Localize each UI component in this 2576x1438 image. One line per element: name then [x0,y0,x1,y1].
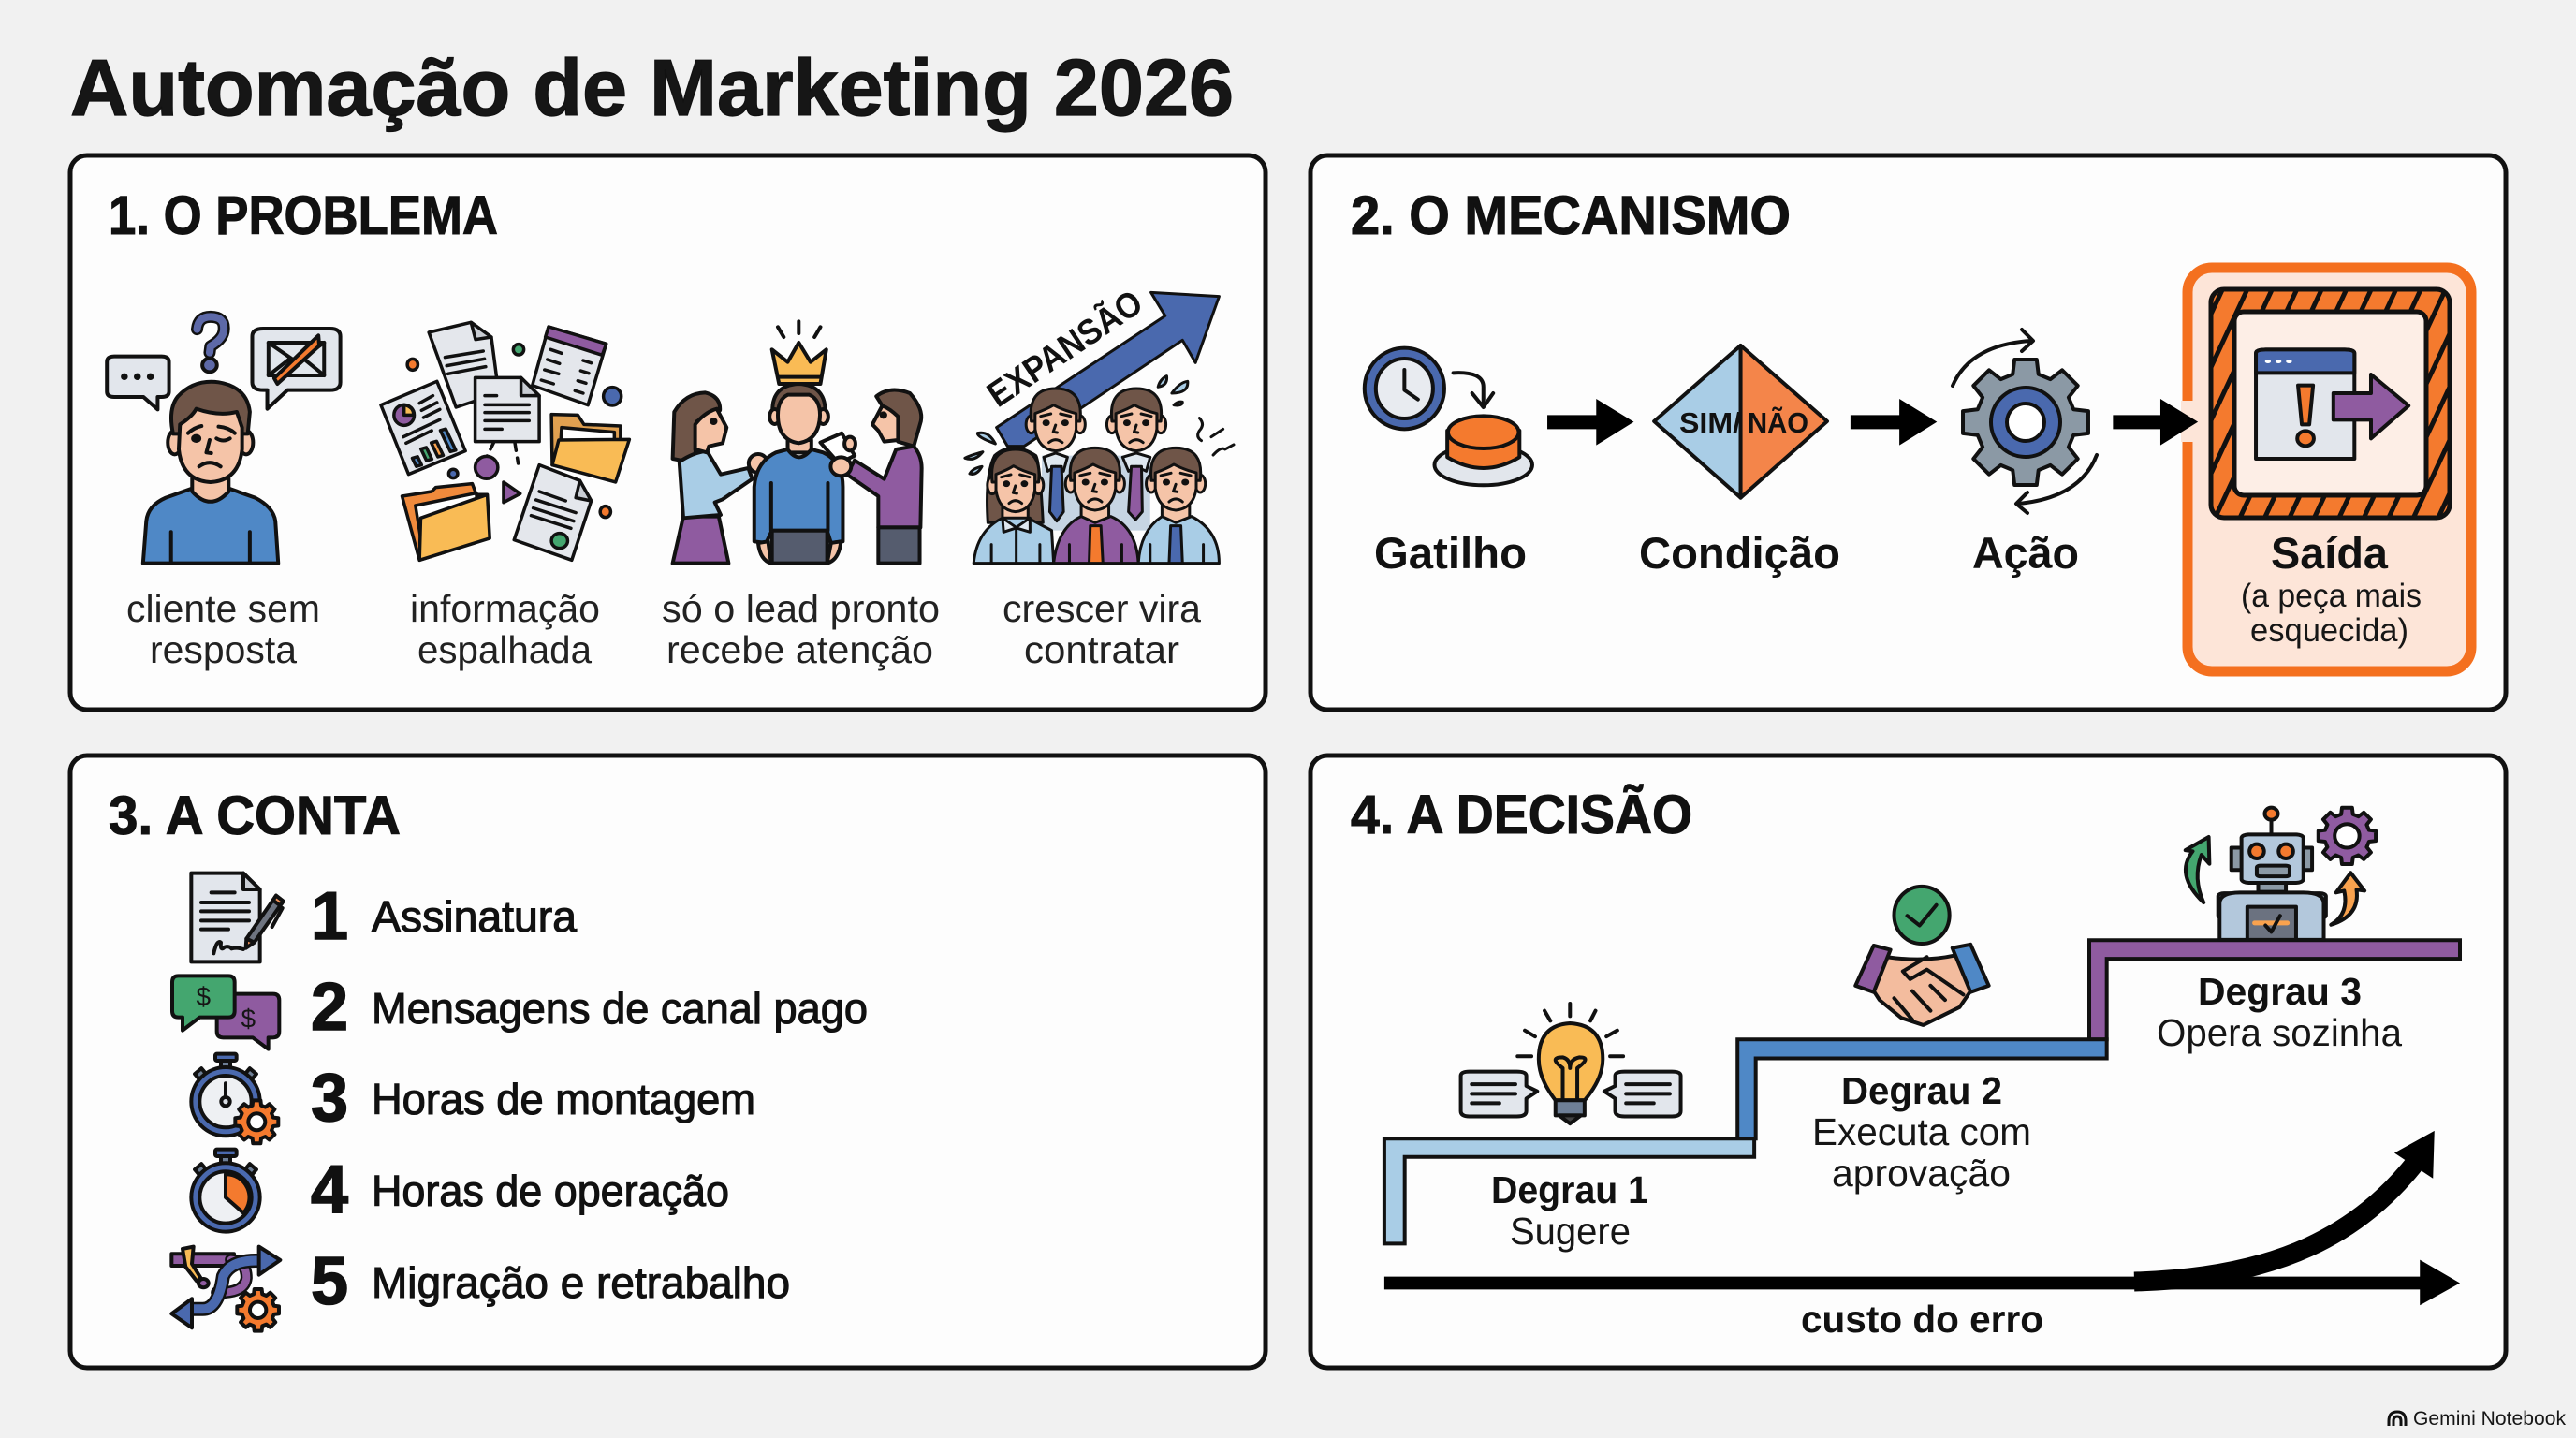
note: a peça mais esquecida: esquecida) [2250,612,2408,649]
heading: O mecanismo: 2. O MECANISMO [1351,185,1791,246]
label: Mensagens de canal pago: Mensagens de canal pago [372,984,868,1033]
caption: informação espalhada: espalhada [417,628,592,671]
arrow label: EXPANSÃO: EXPANSÃO [979,282,1150,415]
label: Degrau 3 Opera sozinha: Degrau 3 [2198,970,2362,1013]
label: Degrau 2 Executa com aprovação [1812,1069,2031,1195]
icon: signed contract [191,873,284,961]
number 3: 3 [311,1061,348,1136]
caption: só o lead pronto recebe atenção [662,587,940,671]
label: Gatilho: Gatilho [1374,528,1527,578]
icon: paid channel messages: $ [197,982,212,1011]
panel: 2. O mecanismo [1310,155,2506,710]
stair: degrau 1 [1384,1138,1754,1243]
icon: yes/no decision diamond: NÃO [1748,406,1808,439]
label: Degrau 2 Executa com aprovação: aprovação [1832,1152,2011,1195]
icon: yes/no decision diamond: SIM/ [1679,406,1741,439]
label: Degrau 3 Opera sozinha [2157,970,2402,1054]
heading: A decisão: 4. A DECISÃO [1351,785,1692,845]
title: Automação de Marketing 2026 [70,44,1234,133]
label: custo do erro: custo do erro [1801,1298,2043,1341]
label: Horas de operação: Horas de operação [372,1167,729,1215]
number 4: 4 [311,1152,348,1227]
caption: só o lead pronto recebe atenção: só o lead pronto [662,587,940,630]
arrow: condição to ação [1851,399,1937,446]
panel: 3. A conta [70,756,1266,1368]
icon: paid channel messages [172,976,279,1049]
label: Degrau 1 Sugere [1491,1168,1648,1253]
caption: informação espalhada [410,587,600,671]
number 2: 2 [311,970,348,1045]
icon: output window with alert [2256,349,2408,459]
label: Horas de montagem: Horas de montagem [372,1075,755,1123]
label: Migração e retrabalho: Migração e retrabalho [372,1258,790,1307]
label: Degrau 1 Sugere: Degrau 1 [1491,1168,1648,1211]
caption: só o lead pronto recebe atenção: recebe atenção [666,628,933,671]
stair: degrau 2 [1737,1039,2107,1138]
arrow: gatilho to condição [1547,399,1633,446]
frame: hatched border [2211,289,2450,518]
panel: 1. O problema [70,155,1266,710]
caption: crescer vira contratar: crescer vira [1003,587,1201,630]
icon: handshake with approval check [1855,887,1989,1025]
icon: migration arrows and rework [171,1247,280,1331]
note: a peça mais esquecida: (a peça mais [2241,578,2422,614]
caption: crescer vira contratar [1003,587,1201,671]
label: Degrau 2 Executa com aprovação: Degrau 2 [1841,1069,2002,1112]
highlight box: Saída [2181,268,2471,671]
icon: growth arrow over stressed team [965,292,1234,564]
label: Saída: Saída [2271,528,2389,578]
icon: gear with rotation arrows [1953,330,2097,513]
caption: cliente sem resposta [126,587,320,671]
caption: informação espalhada: informação [410,587,600,630]
heading: A conta: 3. A CONTA [109,785,401,846]
icon: yes/no decision diamond [1654,345,1827,498]
heading: O problema: 1. O PROBLEMA [109,185,498,246]
arrow: ação to saída [2113,399,2198,446]
icon: paid channel messages: $ [242,1004,256,1033]
icon: light bulb with suggestions [1461,1004,1681,1123]
icon: scattered documents and folders [381,322,629,560]
icon: stopwatch with elapsed time [191,1150,260,1232]
panel: 4. A decisão [1310,756,2506,1368]
stair: degrau 3 [2089,940,2460,1039]
icon: only the ready lead gets attention [673,321,922,564]
label: Assinatura: Assinatura [372,892,577,941]
icon: stopwatch with gear [191,1054,278,1143]
icon: autonomous robot [2186,808,2376,940]
icon: worried customer with unanswered messages [107,316,341,564]
number 1: 1 [311,879,348,954]
label: Ação: Ação [1972,528,2079,578]
caption: cliente sem resposta: resposta [150,628,297,671]
label: Degrau 2 Executa com aprovação: Executa com [1812,1110,2031,1153]
caption: crescer vira contratar: contratar [1024,628,1179,671]
number 5: 5 [311,1244,348,1319]
label: Degrau 3 Opera sozinha: Opera sozinha [2157,1011,2402,1054]
icon: clock trigger and button [1365,348,1532,485]
caption: cliente sem resposta: cliente sem [126,587,320,630]
chart: error cost arrows [1384,1131,2460,1305]
label: Condição: Condição [1639,528,1840,578]
note: a peça mais esquecida [2241,578,2422,649]
watermark: Gemini Notebook: Gemini Notebook [2413,1408,2566,1430]
label: Degrau 1 Sugere: Sugere [1510,1210,1631,1253]
